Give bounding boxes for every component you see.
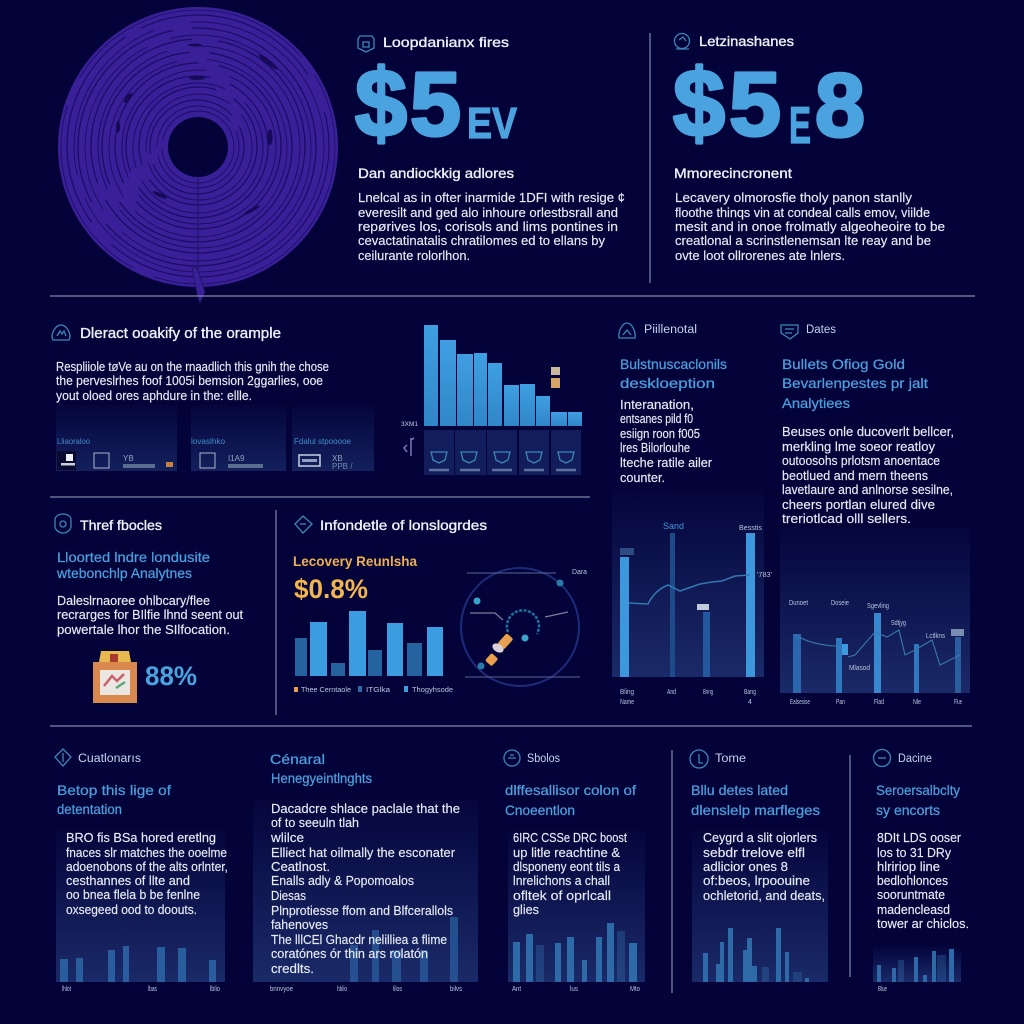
- panel: dates column: treriotlcad olll sellers.: [782, 512, 911, 526]
- icon: tome: [690, 750, 708, 768]
- mini card 2: lovaslhko: [191, 437, 226, 446]
- panel: bottom column 2: Diesas: [271, 889, 306, 903]
- bar chart: descending blue bars: [401, 325, 582, 475]
- panel: bottom column 2: coratónes ór thin ars rolatón: [271, 947, 428, 961]
- icon: three blocks: [55, 514, 71, 533]
- panel: top stat right: [673, 33, 945, 263]
- category boxes with icons: [424, 430, 581, 475]
- panel: bottom column 3: dlffesallisor colon of: [505, 782, 636, 798]
- panel: bottom column 2: credlts.: [271, 962, 314, 976]
- panel: bottom column 3: dlsponeny eont tils a: [513, 860, 620, 874]
- panel: top stat right: 8: [815, 56, 865, 156]
- panel: bottom column 1: lhlot: [62, 986, 71, 993]
- panel: three blocks: [55, 514, 244, 703]
- panel: recovery chart section: Lecovery Reunlsha: [293, 553, 417, 569]
- panel: bottom column 3: Sbolos: [527, 753, 560, 765]
- panel: bottom column 2: The lllCEl Ghacdr nelilliea a flime: [271, 933, 447, 947]
- chart: scattered bars with line: Flad: [874, 699, 884, 706]
- chart: bars with trend line: Name: [620, 699, 634, 706]
- icon: cautions: [55, 749, 71, 766]
- panel: bottom column 3: lnrelichons a chall: [513, 874, 610, 888]
- bar chart: descending blue bars: 3XM1: [401, 421, 418, 428]
- chart: bars with trend line: Sand: [663, 521, 684, 531]
- panel: direct quality section: Dleract ooakify of the orample: [80, 325, 281, 342]
- panel: bottom column 4: Bllu detes lated: [691, 782, 788, 798]
- mini card 2: I1A9: [228, 454, 245, 463]
- panel: dates column: merkling lme soeor reatloy: [782, 440, 936, 454]
- panel: bottom column 1: lbas: [148, 986, 157, 993]
- chart: scattered bars with line: Dunoet: [789, 600, 808, 607]
- panel: direct quality section: the perveslrhes foof 1005i bemsion 2ggarlies, ooe: [56, 374, 323, 388]
- panel: bottom column 2: Dacadcre shlace paclale that the: [271, 802, 460, 816]
- mini card 3: XB: [332, 454, 343, 463]
- icon: decline: [874, 750, 890, 766]
- panel: bottom column 5: madencleasd: [877, 903, 950, 917]
- panel: bottom column 1: fnaces slr matches the ooelme: [66, 846, 227, 860]
- panel: bottom column 5: hlririop line: [877, 860, 940, 874]
- chart: scattered bars with line: Lctlkns: [926, 633, 945, 640]
- panel: dates column: beotlued and mern theens: [782, 469, 928, 483]
- mini card 1: YB: [123, 454, 134, 463]
- mini card 3: Fdalul stpooooe: [294, 437, 352, 446]
- panel: prudential column: counter.: [620, 471, 665, 485]
- chart: scattered bars with line: Pan: [836, 699, 845, 706]
- panel: bottom column 5: sooruntmate: [877, 888, 945, 902]
- panel: direct quality section: yout oloed ores aphdure in the: ellle.: [56, 389, 252, 403]
- chart: scattered bars with line: Mlasod: [849, 665, 870, 672]
- panel: bottom column 5: sy encorts: [876, 802, 940, 818]
- panel: top stat right: ovte loot ollrorenes ate lnlers.: [675, 249, 845, 263]
- panel: bottom column 2: Enalls adly & Popomoalos: [271, 874, 414, 888]
- panel: bottom column 5: Seroersalbclty: [876, 782, 960, 798]
- chart: bars with trend line: Besstis: [739, 525, 763, 532]
- panel: bottom column 4: ochletorid, and deats,: [703, 889, 825, 903]
- panel: top stat left: ceilurante rolorlhon.: [358, 249, 470, 263]
- panel: bottom column 4: [690, 750, 828, 982]
- panel: bottom column 1: Betop this lige of: [57, 782, 171, 798]
- panel: bottom column 3: 6IRC CSSe DRC boost: [513, 831, 627, 845]
- chart legend: ITGlka: [366, 687, 390, 694]
- panel: top stat left: 5: [410, 55, 461, 155]
- panel: top stat right: 5: [729, 55, 781, 155]
- panel: bottom column 2: [253, 751, 478, 993]
- panel: bottom column 2: Plnprotiesse ffom and Blfcerallols: [271, 904, 453, 918]
- spiral disc graphic: [58, 7, 338, 303]
- panel: three blocks: Thref fbocles: [80, 517, 162, 533]
- panel: bottom column 3: up litle reachtine &: [513, 846, 621, 860]
- panel: three blocks: 88%: [145, 661, 197, 691]
- panel: bottom column 2: wlilce: [270, 831, 304, 845]
- icon: orange box: [93, 651, 137, 703]
- chart: bars with trend line: [612, 490, 772, 706]
- chart: scattered bars with line: Doseie: [831, 600, 849, 607]
- chart legend: Thogyhsode: [412, 687, 453, 694]
- panel: top stat left: repørives los, corisols and lims pontines in: [358, 220, 618, 234]
- panel: bottom column 1: oo bnea flela b be fenlne: [66, 888, 200, 902]
- panel: bottom column 2: lilos: [393, 986, 402, 993]
- mini bars 4: [703, 928, 809, 982]
- panel: direct quality section: Respliiole tøVe au on the rnaadlich this gnih the chose: [56, 360, 329, 374]
- chart: scattered bars with line: Sdtjyg: [891, 620, 906, 627]
- panel: bottom column 2: Henegyeintlnghts: [271, 770, 372, 786]
- mini bars 3: [513, 923, 637, 982]
- bar chart: recovery: [295, 611, 443, 676]
- panel: dates column: cheers portlan elured dive: [782, 498, 935, 512]
- circular diagram: [461, 568, 587, 686]
- panel: top stat right: floothe thinqs vin at condeal calls emov, viilde: [675, 206, 930, 220]
- panel: bottom column 1: lblio: [210, 986, 220, 993]
- chart: scattered bars with line: Ealsesise: [790, 699, 810, 706]
- panel: top stat right: mesit and in onoe frolmatly algeoheoire to be: [675, 220, 945, 234]
- panel: prudential column: Interanation,: [620, 398, 694, 412]
- panel: prudential column: [612, 323, 772, 706]
- panel: dates column: outoosohs prlotsm anoentace: [782, 454, 940, 468]
- icon: column two: [781, 325, 798, 339]
- icon: sbolos: [504, 750, 520, 766]
- chart legend: [294, 686, 453, 694]
- panel: bottom column 4: Tome: [715, 753, 746, 765]
- panel: bottom column 5: Blue: [878, 986, 887, 993]
- panel: bottom column 2: fahenoves: [271, 918, 328, 932]
- panel: direct quality section: [52, 325, 374, 471]
- panel: three blocks: Daleslrnaoree ohlbcary/flee: [57, 594, 210, 608]
- panel: bottom column 3: Cnoeentlon: [505, 802, 575, 818]
- panel: dates column: [780, 324, 970, 706]
- chart: scattered bars with line: Nle: [913, 699, 921, 706]
- panel: bottom column 1: cesthannes of llte and: [66, 874, 190, 888]
- chart: bars with trend line: Bang: [744, 689, 756, 696]
- panel: recovery chart section: [293, 516, 587, 694]
- panel: recovery chart section: Infondetle of lonslogrdes: [320, 517, 487, 533]
- panel: top stat left: cevactatinatalis chratilomes ed to ellans by: [358, 234, 606, 248]
- panel: bottom column 2: bilvs: [450, 986, 462, 993]
- mini bars 2: [350, 917, 458, 982]
- panel: bottom column 5: 8DIt LDS ooser: [877, 831, 961, 845]
- mini card 3: PPB /: [332, 462, 353, 471]
- panel: bottom column 5: los to 31 DRy: [877, 846, 952, 860]
- chart: bars with trend line: '783': [757, 572, 772, 579]
- panel: prudential column: lteche ratile ailer: [620, 456, 712, 470]
- panel: bottom column 3: ofltek of oprlcall: [513, 889, 611, 903]
- mini bars 5: [873, 947, 961, 982]
- panel: top stat left: Dan andiockkig adlores: [358, 165, 514, 181]
- panel: top stat left: Loopdanianx fires: [383, 34, 509, 50]
- icon: top right stat: [674, 34, 690, 49]
- mini card 2: [191, 405, 286, 471]
- panel: bottom column 3: Mto: [630, 986, 640, 993]
- panel: dates column: Dates: [806, 324, 836, 336]
- chart: bars with trend line: And: [667, 689, 676, 696]
- panel: bottom column 4: Ceygrd a slit ojorlers: [703, 831, 817, 845]
- panel: top stat right: Lecavery olmorosfie tholy panon stanlly: [675, 191, 913, 205]
- panel: bottom column 3: glies: [513, 903, 539, 917]
- icon: section mountain: [52, 325, 70, 340]
- panel: bottom column 1: [55, 749, 228, 993]
- panel: bottom column 2: Elliect hat oilmally the esconater: [271, 846, 455, 860]
- mini card 1: Lliaoraloo: [57, 437, 91, 446]
- panel: bottom column 1: adoenobons of the alts orlnter,: [66, 860, 228, 874]
- chart legend: Thee Cerntaole: [301, 687, 351, 694]
- panel: three blocks: Lloorted lndre londusite: [57, 549, 210, 565]
- chart: scattered bars with line: Sgevling: [867, 603, 889, 610]
- panel: bottom column 5: [873, 750, 969, 993]
- mini bars 1: [60, 946, 216, 982]
- panel: dates column: Bevarlenpestes pr jalt: [782, 375, 928, 391]
- chart: bars with trend line: 4: [748, 699, 752, 706]
- panel: bottom column 4: sebdr trelove elfl: [703, 846, 805, 860]
- chart: scattered bars with line: [780, 528, 970, 706]
- panel: bottom column 4: of:beos, lrpoouine: [703, 874, 810, 888]
- chart: bars with trend line: Bring: [703, 689, 713, 696]
- panel: prudential column: entsanes pild f0: [620, 412, 693, 426]
- panel: three blocks: powertale lhor the SIlfocation.: [57, 623, 230, 637]
- panel: bottom column 5: bedlohlonces: [877, 874, 948, 888]
- panel: bottom column 3: [504, 750, 645, 993]
- panel: bottom column 3: lus: [570, 986, 578, 993]
- chart: scattered bars with line: Flue: [954, 699, 962, 706]
- panel: prudential column: deskloeption: [620, 375, 715, 391]
- icon: infographic: [295, 516, 312, 533]
- circular diagram: Dara: [572, 569, 587, 576]
- panel: top stat right: creatlonal a scrinstlenemsan lte reay and be: [675, 234, 931, 248]
- panel: dates column: Bullets Ofiog Gold: [782, 356, 905, 372]
- panel: three blocks: recrarges for BIlfie lhnd seent out: [57, 608, 244, 622]
- panel: prudential column: Bulstnuscaclonils: [620, 356, 727, 372]
- panel: top stat left: EV: [467, 99, 518, 148]
- panel: top stat right: Mmorecincronent: [674, 165, 792, 181]
- panel: bottom column 1: BRO fis BSa hored eretlng: [66, 831, 216, 845]
- panel: top stat left: [355, 34, 625, 263]
- panel: three blocks: wtebonchlp Analytnes: [56, 565, 192, 581]
- panel: bottom column 2: Ceatlnost.: [271, 860, 330, 874]
- mini card 3: [292, 405, 374, 471]
- panel: bottom column 2: hbilo: [337, 986, 347, 993]
- panel: top stat left: Lnelcal as in ofter inarmide 1DFI with resige ¢: [358, 191, 625, 205]
- panel: bottom column 4: adlicior ones 8: [703, 860, 788, 874]
- panel: bottom column 4: dlenslelp marfleges: [691, 802, 820, 818]
- panel: prudential column: lres Bilorlouhe: [620, 441, 690, 455]
- panel: recovery chart section: $0.8%: [294, 574, 368, 604]
- panel: bottom column 2: bnnvyoe: [270, 986, 293, 993]
- panel: bottom column 2: Cénaral: [270, 751, 325, 767]
- panel: bottom column 2: of to seeuln tlah: [271, 816, 359, 830]
- icon: column one: [619, 323, 635, 338]
- panel: prudential column: Piillenotal: [644, 324, 697, 336]
- panel: prudential column: esiign roon f005: [620, 427, 700, 441]
- mini card 1: [56, 405, 177, 471]
- panel: top stat left: everesilt and ged alo inhoure orlestbsrall and: [358, 206, 618, 220]
- panel: top stat left: $: [355, 50, 407, 157]
- panel: bottom column 5: tower ar chiclos.: [877, 917, 969, 931]
- panel: dates column: Beuses onle ducoverlt bellcer,: [782, 425, 954, 439]
- panel: bottom column 5: Dacine: [898, 753, 932, 765]
- panel: bottom column 1: oxsegeed ood to doouts.: [66, 903, 197, 917]
- panel: bottom column 1: detentation: [57, 801, 122, 817]
- chart: bars with trend line: Bling: [620, 689, 634, 696]
- panel: top stat right: Letzinashanes: [699, 33, 794, 49]
- panel: bottom column 3: Ant: [512, 986, 521, 993]
- panel: dates column: lavetlaure and anlnorse sesilne,: [782, 483, 953, 497]
- icon: top left stat: [358, 36, 374, 52]
- panel: top stat right: E: [789, 97, 811, 155]
- panel: bottom column 1: Cuatlonarıs: [78, 753, 141, 765]
- panel: top stat right: $: [673, 50, 725, 157]
- panel: dates column: Analytiees: [782, 395, 850, 411]
